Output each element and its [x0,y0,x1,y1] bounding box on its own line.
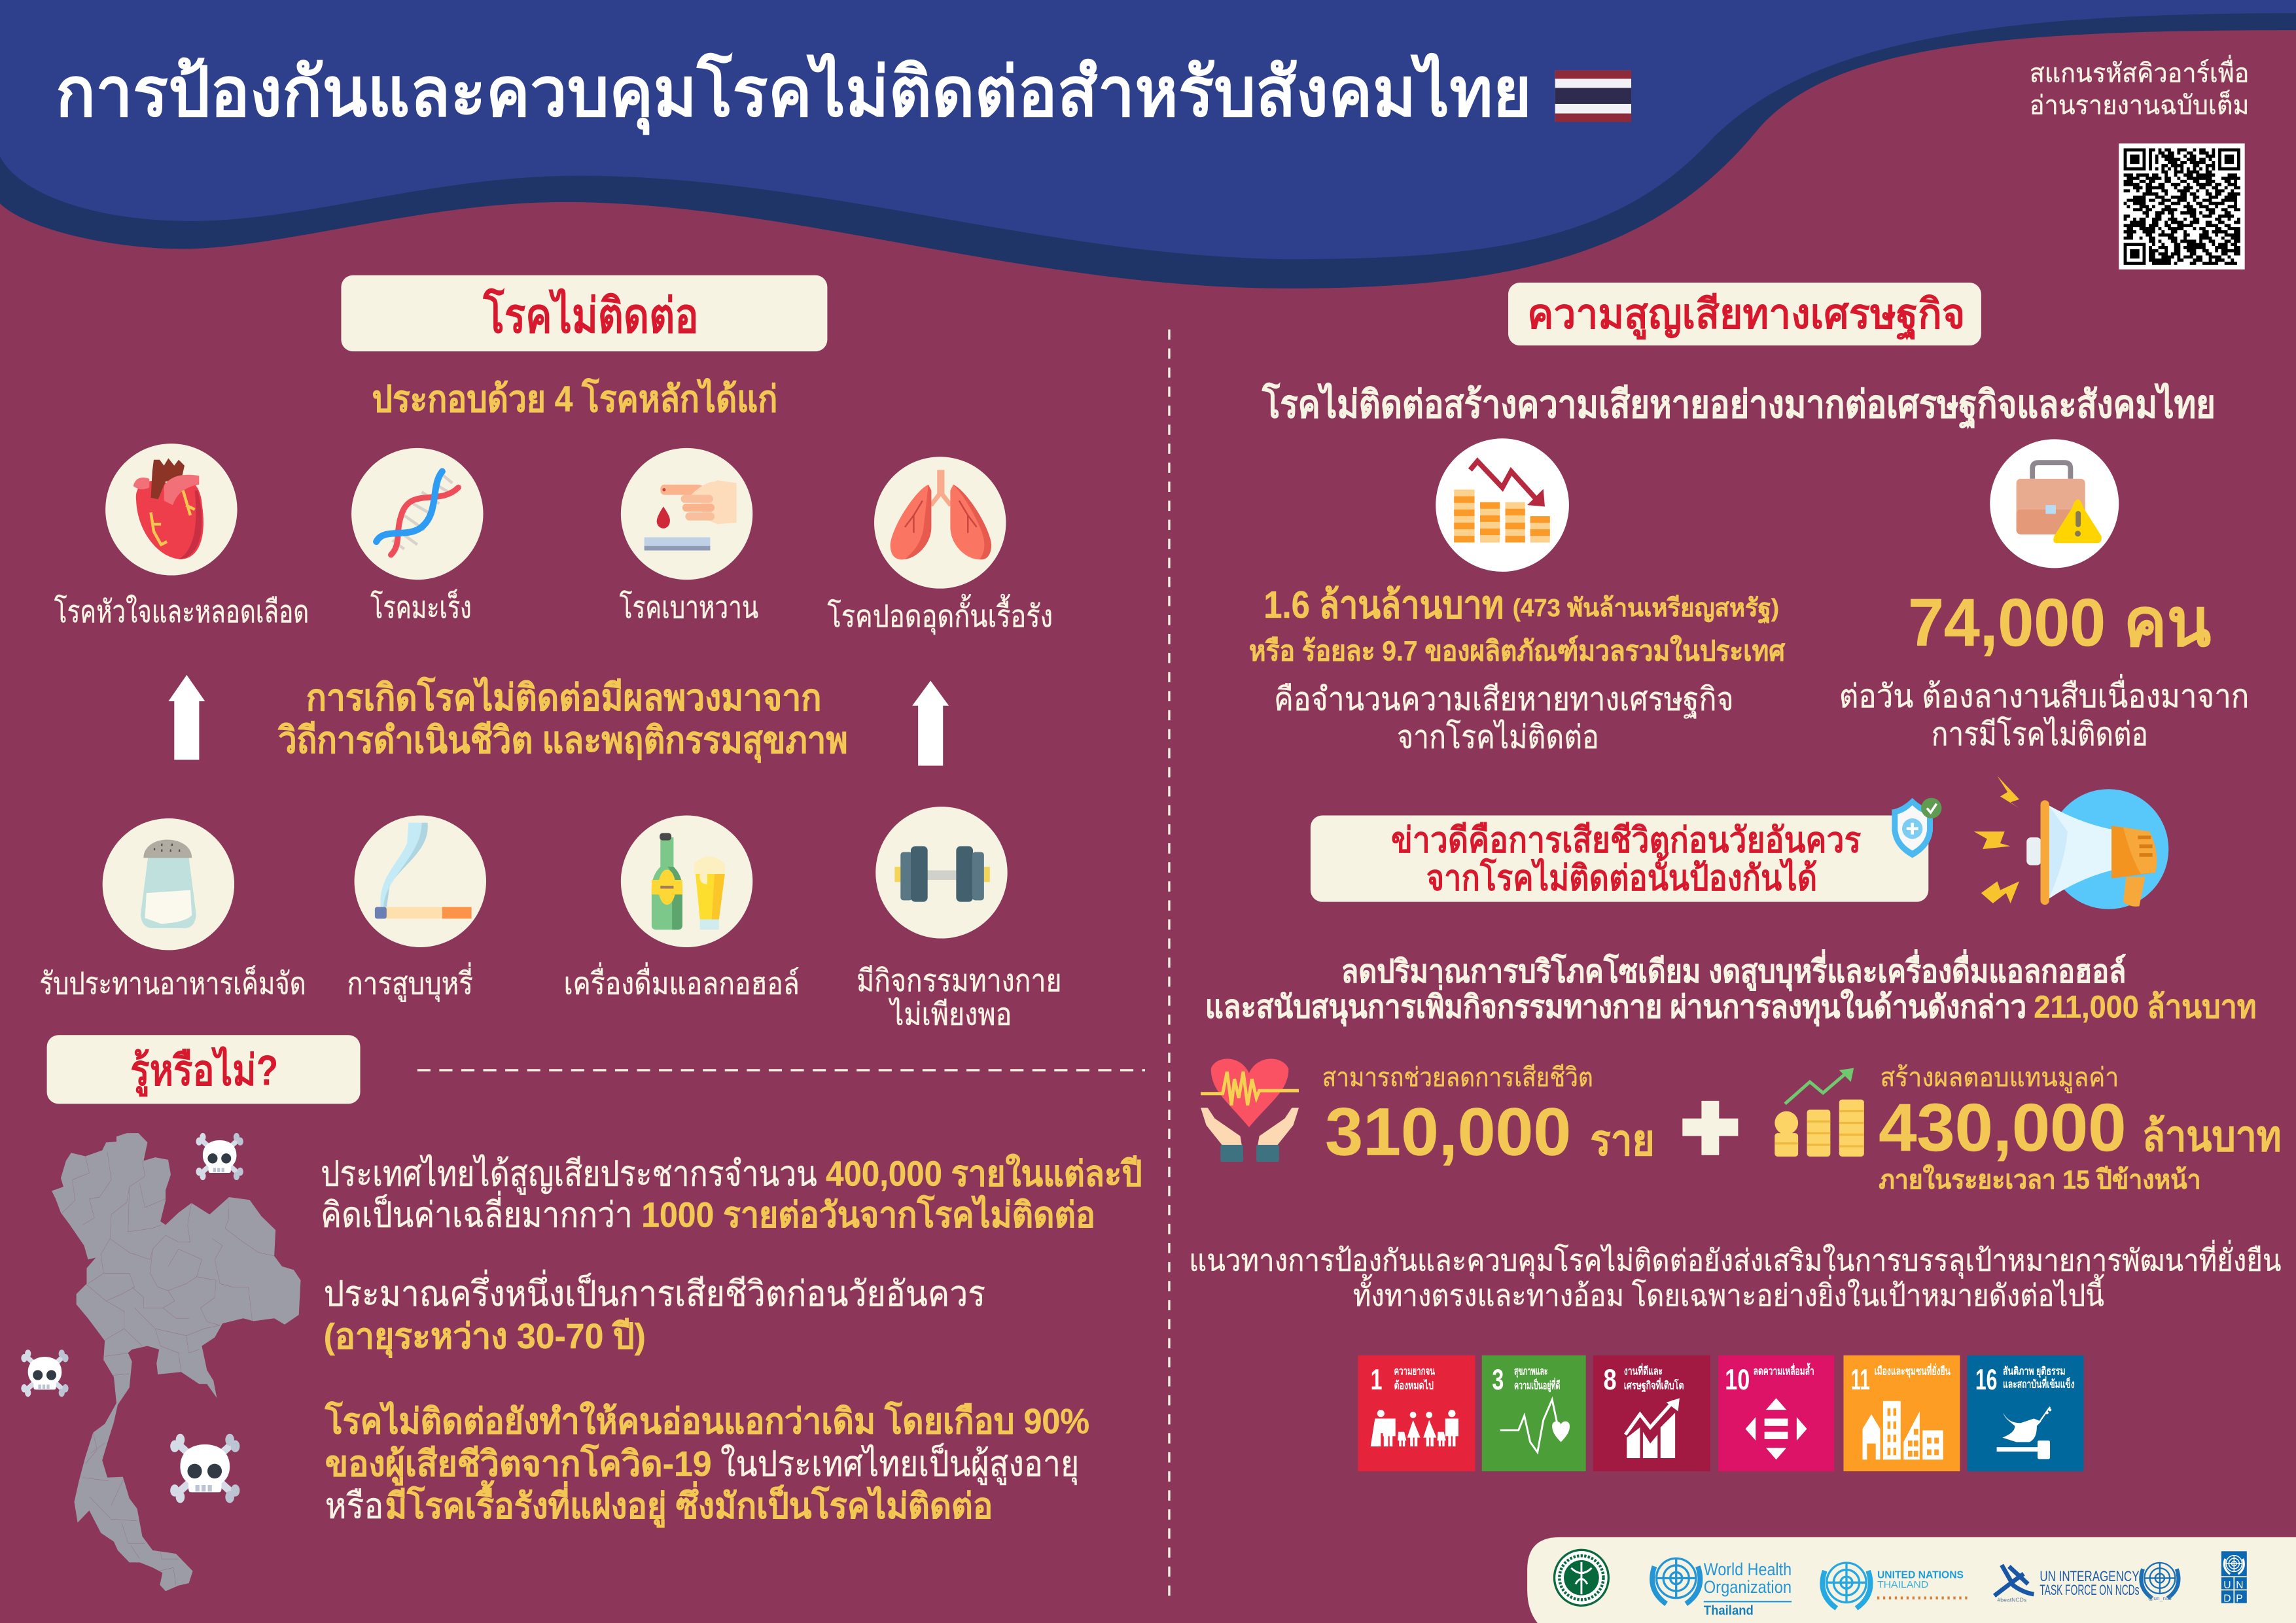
SDG tile 10 [1718,1355,1834,1471]
logo: WHO Thailand [1652,1558,1792,1618]
logo: UNDP: D [2223,1593,2231,1604]
text: measures: ลดปริมาณการบริโภคโซเดียม งดสูบบุหรี่และเครื่องดื่มแอลกอฮอล์ [1341,949,2126,992]
icon: DNA [351,448,484,580]
icon: lungs [874,457,1006,589]
logo: UN Interagency Task Force: #beatNCDs [1997,1597,2026,1603]
SDG tile 8: งานที่ดีและ [1624,1363,1663,1377]
SDG tile 16 [1968,1355,2084,1471]
text: 400,000 per year: คิดเป็นค่าเฉลี่ยมากกว่า [321,1190,633,1234]
logo: UNDP: N [2236,1580,2244,1591]
stat: 1.6 trillion baht: หรือ ร้อยละ 9.7 ของผลิตภัณฑ์มวลรวมในประเทศ [1249,635,1786,667]
logo: United Nations Thailand: UNITED NATIONS [1877,1569,1964,1580]
stat: 310,000 lives: สามารถช่วยลดการเสียชีวิต [1322,1063,1593,1092]
text: premature deaths: (อายุระหว่าง 30-70 ปี) [324,1317,646,1358]
icon: Thai flag [1555,70,1631,122]
arrow: right [912,681,949,765]
text: leave per day: การมีโรคไม่ติดต่อ [1932,716,2148,752]
text: 400,000 per year: 1000 รายต่อวันจากโรคไม่ติดต่อ [641,1194,1095,1234]
SDG tile 1: ความยากจน [1394,1365,1435,1377]
icon: falling coins [1436,438,1569,572]
logo: UN Interagency Task Force [1994,1563,2178,1603]
stat: 430,000 million baht: 430,000 [1879,1090,2126,1165]
text: economic damage [1274,681,1734,756]
logo: UNDP [2221,1551,2247,1604]
icon: megaphone [1974,776,2168,909]
callout: good news [1311,816,1928,902]
stat: 430,000 million baht: ภายในระยะเวลา 15 ปีข้างหน้า [1879,1164,2201,1195]
subheading: 4 diseases: ประกอบด้วย 4 โรคหลักได้แก่ [372,377,777,419]
text: premature deaths [324,1269,985,1358]
SDG tile 11: 11 [1851,1363,1870,1396]
map: Thailand [52,1133,300,1591]
stat: 74,000 people: 74,000 คน [1908,585,2211,660]
text: COVID [325,1401,1089,1528]
logo: WHO Thailand: World Health [1704,1560,1792,1579]
icon: skull left [21,1350,69,1397]
label: cancer: โรคมะเร็ง [370,588,472,624]
text: measures: และสนับสนุนการเพิ่มกิจกรรมทางกาย ผ่านการลงทุนในด้านดังกล่าว [1205,984,2026,1026]
icon: heart [105,444,238,576]
header wave: dark band [0,0,2296,288]
text: SDG intro: ทั้งทางตรงและทางอ้อม โดยเฉพาะอย่างยิ่งในเป้าหมายดังต่อไปนี้ [1353,1274,2104,1312]
SDG tile 8: เศรษฐกิจที่เติบโต [1624,1377,1684,1392]
label: smoking: การสูบบุหรี่ [347,962,473,1003]
logo: UN Interagency Task Force: UN INTERAGENCY [2040,1568,2140,1584]
text: COVID: มีโรคเรื้อรังที่แฝงอยู่ ซึ่งมักเป็นโรคไม่ติดต่อ [385,1480,993,1528]
icon: cigarette [355,816,486,947]
icon: heart in hands [1201,1059,1299,1162]
label: salty food: รับประทานอาหารเค็มจัด [39,965,306,1001]
logo: WHO Thailand: Organization [1704,1577,1792,1597]
text: COVID: โรคไม่ติดต่อยังทำให้คนอ่อนแอกว่าเดิม โดยเกือบ 90% [325,1401,1089,1441]
heading: economic loss: ความสูญเสียทางเศรษฐกิจ [1527,291,1965,340]
logo: UN Interagency Task Force: @un_ncd [2148,1596,2172,1601]
header wave: blue [0,0,2296,259]
SDG tile 16: สันติภาพ ยุติธรรม [2003,1365,2066,1378]
label: physical activity: ไม่เพียงพอ [888,997,1012,1032]
text: economic damage: จากโรคไม่ติดต่อ [1397,719,1599,756]
SDG tile 11 [1843,1355,1960,1471]
icon: shield [1892,798,1941,858]
stat: 310,000 lives [1322,1063,1655,1170]
icon: salt shaker [103,818,234,950]
stat: 430,000 million baht [1879,1063,2282,1195]
logo: United Nations Thailand [1822,1563,1969,1608]
heading: NCD [341,275,827,351]
SDG tile 3: สุขภาพและ [1514,1365,1547,1378]
stat: 310,000 lives: ราย [1590,1117,1655,1164]
heading: did you know [47,1035,361,1104]
stat: 1.6 trillion baht: 1.6 ล้านล้านบาท [1263,584,1504,626]
heading: economic loss [1508,283,1981,345]
panel: NCD left [21,275,1145,1591]
SDG tile 3: 3 [1492,1363,1504,1396]
SDG tile 16: 16 [1975,1363,1997,1396]
text: COVID: หรือ [325,1487,383,1526]
SDG tile 1: 1 [1371,1363,1383,1396]
SDG tile 8 [1593,1355,1710,1471]
icon: dumbbell [875,807,1008,939]
label: heart disease: โรคหัวใจและหลอดเลือด [54,594,309,629]
stat: 430,000 million baht: สร้างผลตอบแทนมูลค่า [1880,1063,2119,1094]
SDG tile 1 [1358,1355,1475,1471]
icon: skull top [196,1133,243,1180]
footer: partner logos [1527,1537,2296,1623]
text: COVID: ของผู้เสียชีวิตจากโควิด-19 [325,1443,712,1486]
stat: 310,000 lives: 310,000 [1325,1094,1571,1170]
panel: economic loss right [1189,283,2296,1623]
text: economic damage: คือจำนวนความเสียหายทางเศรษฐกิจ [1274,681,1734,718]
text: 400,000 per year [321,1154,1142,1234]
SDG tile 1: ต้องหมดไป [1394,1378,1434,1391]
stat: 1.6 trillion baht: (473 พันล้านเหรียญสหรัฐ) [1513,595,1779,624]
SDG tile 10: 10 [1725,1363,1750,1396]
SDG tile 3 [1482,1355,1586,1471]
text: 400,000 per year: 400,000 รายในแต่ละปี [826,1154,1142,1194]
text: COVID: ในประเทศไทยเป็นผู้สูงอายุ [720,1443,1079,1485]
label: alcohol: เครื่องดื่มแอลกอฮอล์ [564,962,800,1001]
text: leave per day: ต่อวัน ต้องลางานสืบเนื่องมาจาก [1839,674,2249,714]
text: leave per day [1839,674,2249,752]
QR code [2119,143,2245,270]
text: measures [1205,949,2257,1026]
text: measures: 211,000 ล้านบาท [2034,989,2257,1024]
SDG tile 10: ลดความเหลื่อมล้ำ [1754,1362,1814,1377]
icon: skull large [170,1434,239,1503]
arrow: left [168,675,205,760]
logo: WHO Thailand: Thailand [1704,1603,1754,1618]
stat: 430,000 million baht: ล้านบาท [2142,1112,2282,1160]
QR caption: สแกนรหัสคิวอาร์เพื่อ [2030,54,2249,88]
QR caption [2030,54,2249,120]
icon: plus [1682,1101,1738,1155]
QR caption: อ่านรายงานฉบับเต็ม [2030,90,2249,120]
text: premature deaths: ประมาณครึ่งหนึ่งเป็นการเสียชีวิตก่อนวัยอันควร [324,1269,985,1314]
logo: United Nations Thailand: THAILAND [1877,1580,1928,1590]
text: 400,000 per year: ประเทศไทยได้สูญเสียประชากรจำนวน [321,1154,817,1195]
stat: 1.6 trillion baht [1249,584,1786,667]
icon: alcohol [621,816,752,947]
text: lifestyle [278,676,848,763]
SDG tile 11: เมืองและชุมชนที่ยั่งยืน [1874,1363,1951,1378]
logo: UNDP: P [2236,1593,2243,1604]
logo: Ministry of Public Health [1555,1550,1608,1605]
callout: good news: ข่าวดีคือการเสียชีวิตก่อนวัยอันควร [1391,820,1861,860]
SDG tile 3: ความเป็นอยู่ที่ดี [1514,1377,1560,1393]
icon: briefcase warning [1990,439,2119,568]
icon: coins with green arrow [1775,1068,1864,1157]
logo: UNDP: U [2223,1580,2231,1591]
SDG tile 16: และสถาบันที่เข้มแข็ง [2003,1376,2075,1391]
label: physical activity [857,963,1061,1032]
logo: UN Interagency Task Force: TASK FORCE ON NCDs [2040,1582,2140,1598]
divider [1169,330,1170,1596]
label: chronic lung disease: โรคปอดอุดกั้นเรื้อรัง [827,594,1053,635]
text: lifestyle: การเกิดโรคไม่ติดต่อมีผลพวงมาจาก [306,676,821,718]
heading: did you know: รู้หรือไม่? [130,1045,278,1097]
label: diabetes: โรคเบาหวาน [620,589,758,624]
heading: NCD: โรคไม่ติดต่อ [483,287,698,343]
icon: blood sugar finger [621,448,752,580]
title: การป้องกันและควบคุมโรคไม่ติดต่อสำหรับสังคมไทย [56,52,1532,135]
text: lifestyle: วิถีการดำเนินชีวิต และพฤติกรรมสุขภาพ [278,719,848,763]
label: physical activity: มีกิจกรรมทางกาย [857,963,1061,998]
callout: good news: จากโรคไม่ติดต่อนั้นป้องกันได้ [1426,852,1817,898]
text: SDG intro [1189,1240,2282,1312]
SDG tile 8: 8 [1603,1363,1617,1396]
